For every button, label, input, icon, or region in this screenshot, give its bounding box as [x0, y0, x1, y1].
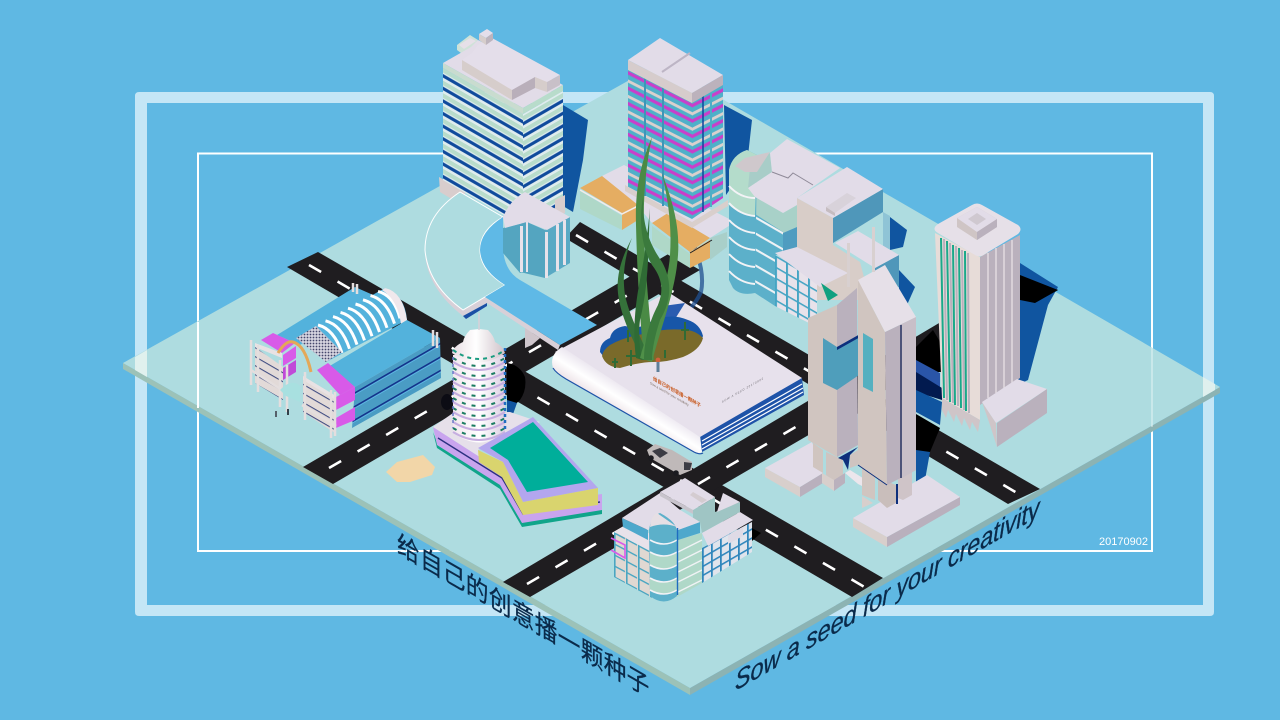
- magenta accents: [261, 333, 295, 353]
- tower base: [439, 177, 465, 207]
- cast shadows: [441, 105, 1058, 541]
- rounded tower: [729, 150, 757, 294]
- cover title: 给自己的创意播一颗种子: [653, 375, 701, 409]
- soil: [602, 329, 703, 368]
- right tower: [858, 280, 887, 485]
- spire: [478, 313, 480, 330]
- person: [656, 358, 660, 372]
- left tower: [808, 305, 837, 457]
- leaf: [641, 197, 669, 360]
- tower faces: [443, 68, 523, 226]
- thin frame: [198, 154, 1152, 551]
- Chinese slogan: 给自己的创意播一颗种子: [397, 528, 649, 703]
- building: twin towers: [765, 227, 960, 547]
- lavender roof rim: [478, 417, 598, 502]
- right grid face: [702, 522, 752, 583]
- building: bottom block: [611, 478, 753, 602]
- building: tall ribbed tower: [934, 204, 1047, 447]
- right legs: [862, 465, 875, 500]
- main roof: [748, 139, 840, 213]
- leaf: [634, 208, 650, 360]
- ground plate: [123, 63, 1220, 695]
- window band: [728, 527, 743, 544]
- bridge pillar: [525, 328, 540, 348]
- roofs: [622, 493, 680, 530]
- date stamp: 20170902: [1099, 536, 1148, 548]
- left grid face: [614, 532, 652, 598]
- cover footer: SOW A SEED 20170902: [722, 376, 764, 404]
- curved roof: [503, 192, 570, 230]
- building: mid-right complex: [729, 139, 899, 327]
- tower faces: [628, 68, 692, 219]
- orange block right: [652, 213, 710, 252]
- orange arch: [278, 342, 311, 372]
- building: round tower with low block: [433, 313, 602, 527]
- rock: [386, 455, 435, 482]
- left legs: [813, 443, 823, 473]
- left facade: [935, 233, 980, 420]
- grid wing: [775, 255, 817, 327]
- ribbon walkway: [480, 217, 597, 345]
- tower roof: [443, 40, 563, 108]
- entrance arch: [280, 383, 300, 402]
- right tower sloped roof: [858, 265, 916, 332]
- cacti: [612, 322, 689, 368]
- orange block left: [580, 176, 638, 213]
- podium deck: [425, 192, 505, 310]
- left window: [823, 333, 862, 390]
- tall block: [797, 198, 870, 300]
- book cover: [555, 292, 802, 437]
- building: magenta-striped tower with orange podium: [580, 38, 735, 268]
- plant shadow on cover: [655, 303, 685, 327]
- curved podium with ribbon: [425, 192, 597, 350]
- building: arched hall: [251, 283, 441, 438]
- base platform lower bands: [433, 432, 602, 527]
- leaf: [636, 137, 654, 360]
- leaf: [618, 238, 650, 360]
- centre mint face: [677, 533, 702, 597]
- right base: [853, 518, 887, 547]
- book spine: [552, 347, 702, 453]
- left base: [765, 468, 800, 497]
- roof: [934, 204, 1020, 256]
- book page edges: [700, 378, 804, 452]
- antennas: [847, 243, 850, 287]
- annex: [982, 402, 997, 447]
- facades: [255, 347, 283, 400]
- layered side: [352, 338, 441, 428]
- podium roof: [602, 165, 735, 238]
- right tower window: [863, 333, 873, 392]
- cover subtitle: Sow a seed for your creativity: [650, 381, 689, 407]
- English slogan: Sow a seed for your creativity: [735, 491, 1041, 697]
- roads: [287, 222, 1058, 597]
- right facade: [980, 235, 1020, 405]
- magenta bracket: [611, 538, 625, 558]
- rear blue roof: [277, 287, 380, 345]
- hole wall: [600, 316, 703, 365]
- dome: [452, 329, 505, 362]
- low roof: [875, 255, 899, 300]
- plant: [612, 137, 689, 372]
- round cap wall: [748, 153, 772, 188]
- teal block side: [622, 518, 648, 540]
- car: [647, 444, 692, 476]
- curved stair tower: [649, 513, 677, 602]
- pillars: [251, 283, 437, 438]
- people: [275, 411, 277, 417]
- building: book with soil bed: [552, 292, 804, 454]
- wing facade: [755, 197, 783, 306]
- mint upper block: [693, 497, 740, 533]
- leaf: [640, 173, 678, 362]
- green roof: [490, 422, 588, 492]
- lower roof: [328, 320, 440, 387]
- building: round-roofed block on podium: [503, 192, 570, 278]
- barrel vault: [296, 288, 407, 362]
- yellow wall: [478, 450, 598, 515]
- roof box: [957, 207, 997, 240]
- back roof parts: [457, 35, 478, 56]
- roof plant box: [462, 38, 560, 90]
- tower body: [453, 355, 505, 442]
- platform top: [433, 412, 540, 470]
- thick frame: [135, 92, 1214, 616]
- side grid: [883, 212, 890, 255]
- tower roof: [628, 38, 723, 93]
- roof cube: [479, 29, 493, 38]
- podium edge: [425, 192, 560, 350]
- feet: [942, 398, 980, 432]
- building: blue-striped tower: [439, 29, 565, 226]
